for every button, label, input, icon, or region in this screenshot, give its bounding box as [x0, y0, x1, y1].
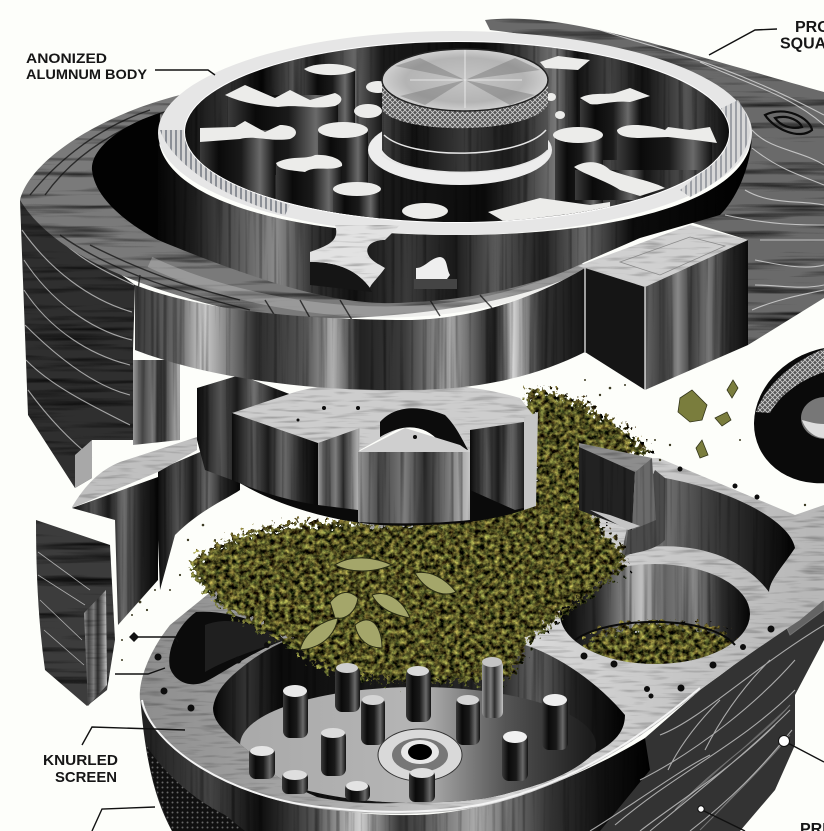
pin — [406, 666, 431, 722]
sunburst — [395, 58, 540, 105]
ring interior — [185, 42, 729, 222]
pin — [482, 657, 503, 718]
label: anodized aluminum body: ANONIZED — [26, 50, 107, 66]
herb in right hole — [582, 619, 738, 664]
herb pile — [190, 390, 650, 682]
rear left block — [197, 375, 292, 480]
central knob — [368, 49, 552, 185]
loose knurled cap — [754, 348, 824, 484]
pin — [409, 768, 435, 802]
tooth columns — [200, 70, 712, 230]
wood fragment — [36, 520, 115, 706]
dark notch — [380, 408, 468, 450]
pin — [502, 731, 528, 781]
post under band — [133, 360, 180, 445]
ring outer — [158, 31, 752, 235]
small front tooth — [414, 257, 457, 289]
upper grinder housing — [20, 19, 824, 488]
knurled lower band — [146, 745, 245, 831]
left wood top face — [20, 95, 590, 320]
label: knurled screen: KNURLED — [43, 752, 118, 769]
top plate — [232, 382, 537, 455]
pin — [361, 695, 385, 745]
right block face — [470, 420, 537, 510]
post foot — [75, 440, 92, 488]
knurled band — [382, 80, 548, 128]
pin — [282, 770, 308, 794]
herb leaves — [300, 558, 456, 650]
collar — [368, 115, 552, 185]
plate rim highlight — [142, 688, 700, 812]
tooth tops — [200, 56, 717, 222]
dark speckled rear wall — [158, 435, 240, 590]
label: knurled screen: SCREEN — [55, 769, 117, 786]
tall block on lower chamber — [579, 443, 665, 555]
knob top — [382, 49, 548, 111]
black hollow — [92, 113, 160, 240]
floating herb pieces — [678, 380, 738, 458]
ring ticks — [160, 130, 290, 215]
block 2 top — [358, 428, 470, 452]
machined plate surface — [140, 458, 824, 814]
pin — [249, 746, 275, 779]
pins and center boss — [249, 657, 568, 802]
stippled shadow — [205, 621, 285, 672]
light top of segment — [72, 437, 197, 508]
rotor holes — [296, 406, 417, 439]
square block top — [578, 225, 748, 287]
callout markers — [129, 632, 790, 812]
block 2 face — [358, 452, 470, 523]
label: top right — [780, 19, 824, 52]
lower left broken segments — [36, 435, 240, 706]
pin — [335, 663, 360, 712]
front T-shaped tooth — [310, 225, 400, 292]
block top inset — [620, 237, 725, 275]
right wood body — [485, 19, 824, 345]
cap bore — [801, 397, 824, 439]
lower outer body wall — [140, 695, 652, 831]
left cavity — [213, 627, 625, 803]
cavity floor — [240, 687, 596, 803]
pin — [321, 728, 346, 776]
plate screw holes — [154, 466, 774, 712]
back cavity wall — [620, 470, 795, 592]
label: anodized aluminum body: ALUMNUM BODY — [26, 66, 148, 82]
label: anodized aluminum body — [26, 50, 148, 82]
block side face — [318, 428, 360, 510]
middle rotor — [197, 375, 538, 526]
interior wall and teeth — [185, 42, 730, 230]
square block right face — [645, 240, 748, 390]
label: knurled screen — [43, 752, 118, 786]
lower cylinder — [382, 95, 548, 172]
lower right wood arm — [590, 538, 824, 831]
center boss — [378, 729, 462, 781]
right round hole — [560, 564, 750, 664]
pin — [283, 685, 308, 738]
right block edge — [524, 412, 538, 510]
herb speckle — [121, 379, 806, 661]
left wood side — [20, 200, 135, 488]
black opening at left of plate — [169, 612, 285, 684]
front block face — [232, 413, 318, 505]
lower grinder chamber — [121, 379, 824, 831]
cylinder groove — [382, 130, 548, 172]
outer wall beneath ring — [158, 133, 752, 303]
pin — [542, 694, 568, 750]
square block left face — [585, 268, 645, 390]
curved metal segment — [72, 477, 158, 625]
pin — [456, 695, 480, 745]
pin — [345, 781, 370, 801]
rotor underside shadow — [232, 460, 535, 526]
wood knot — [765, 111, 812, 134]
metal band — [135, 268, 585, 390]
cap knurling — [756, 349, 824, 413]
